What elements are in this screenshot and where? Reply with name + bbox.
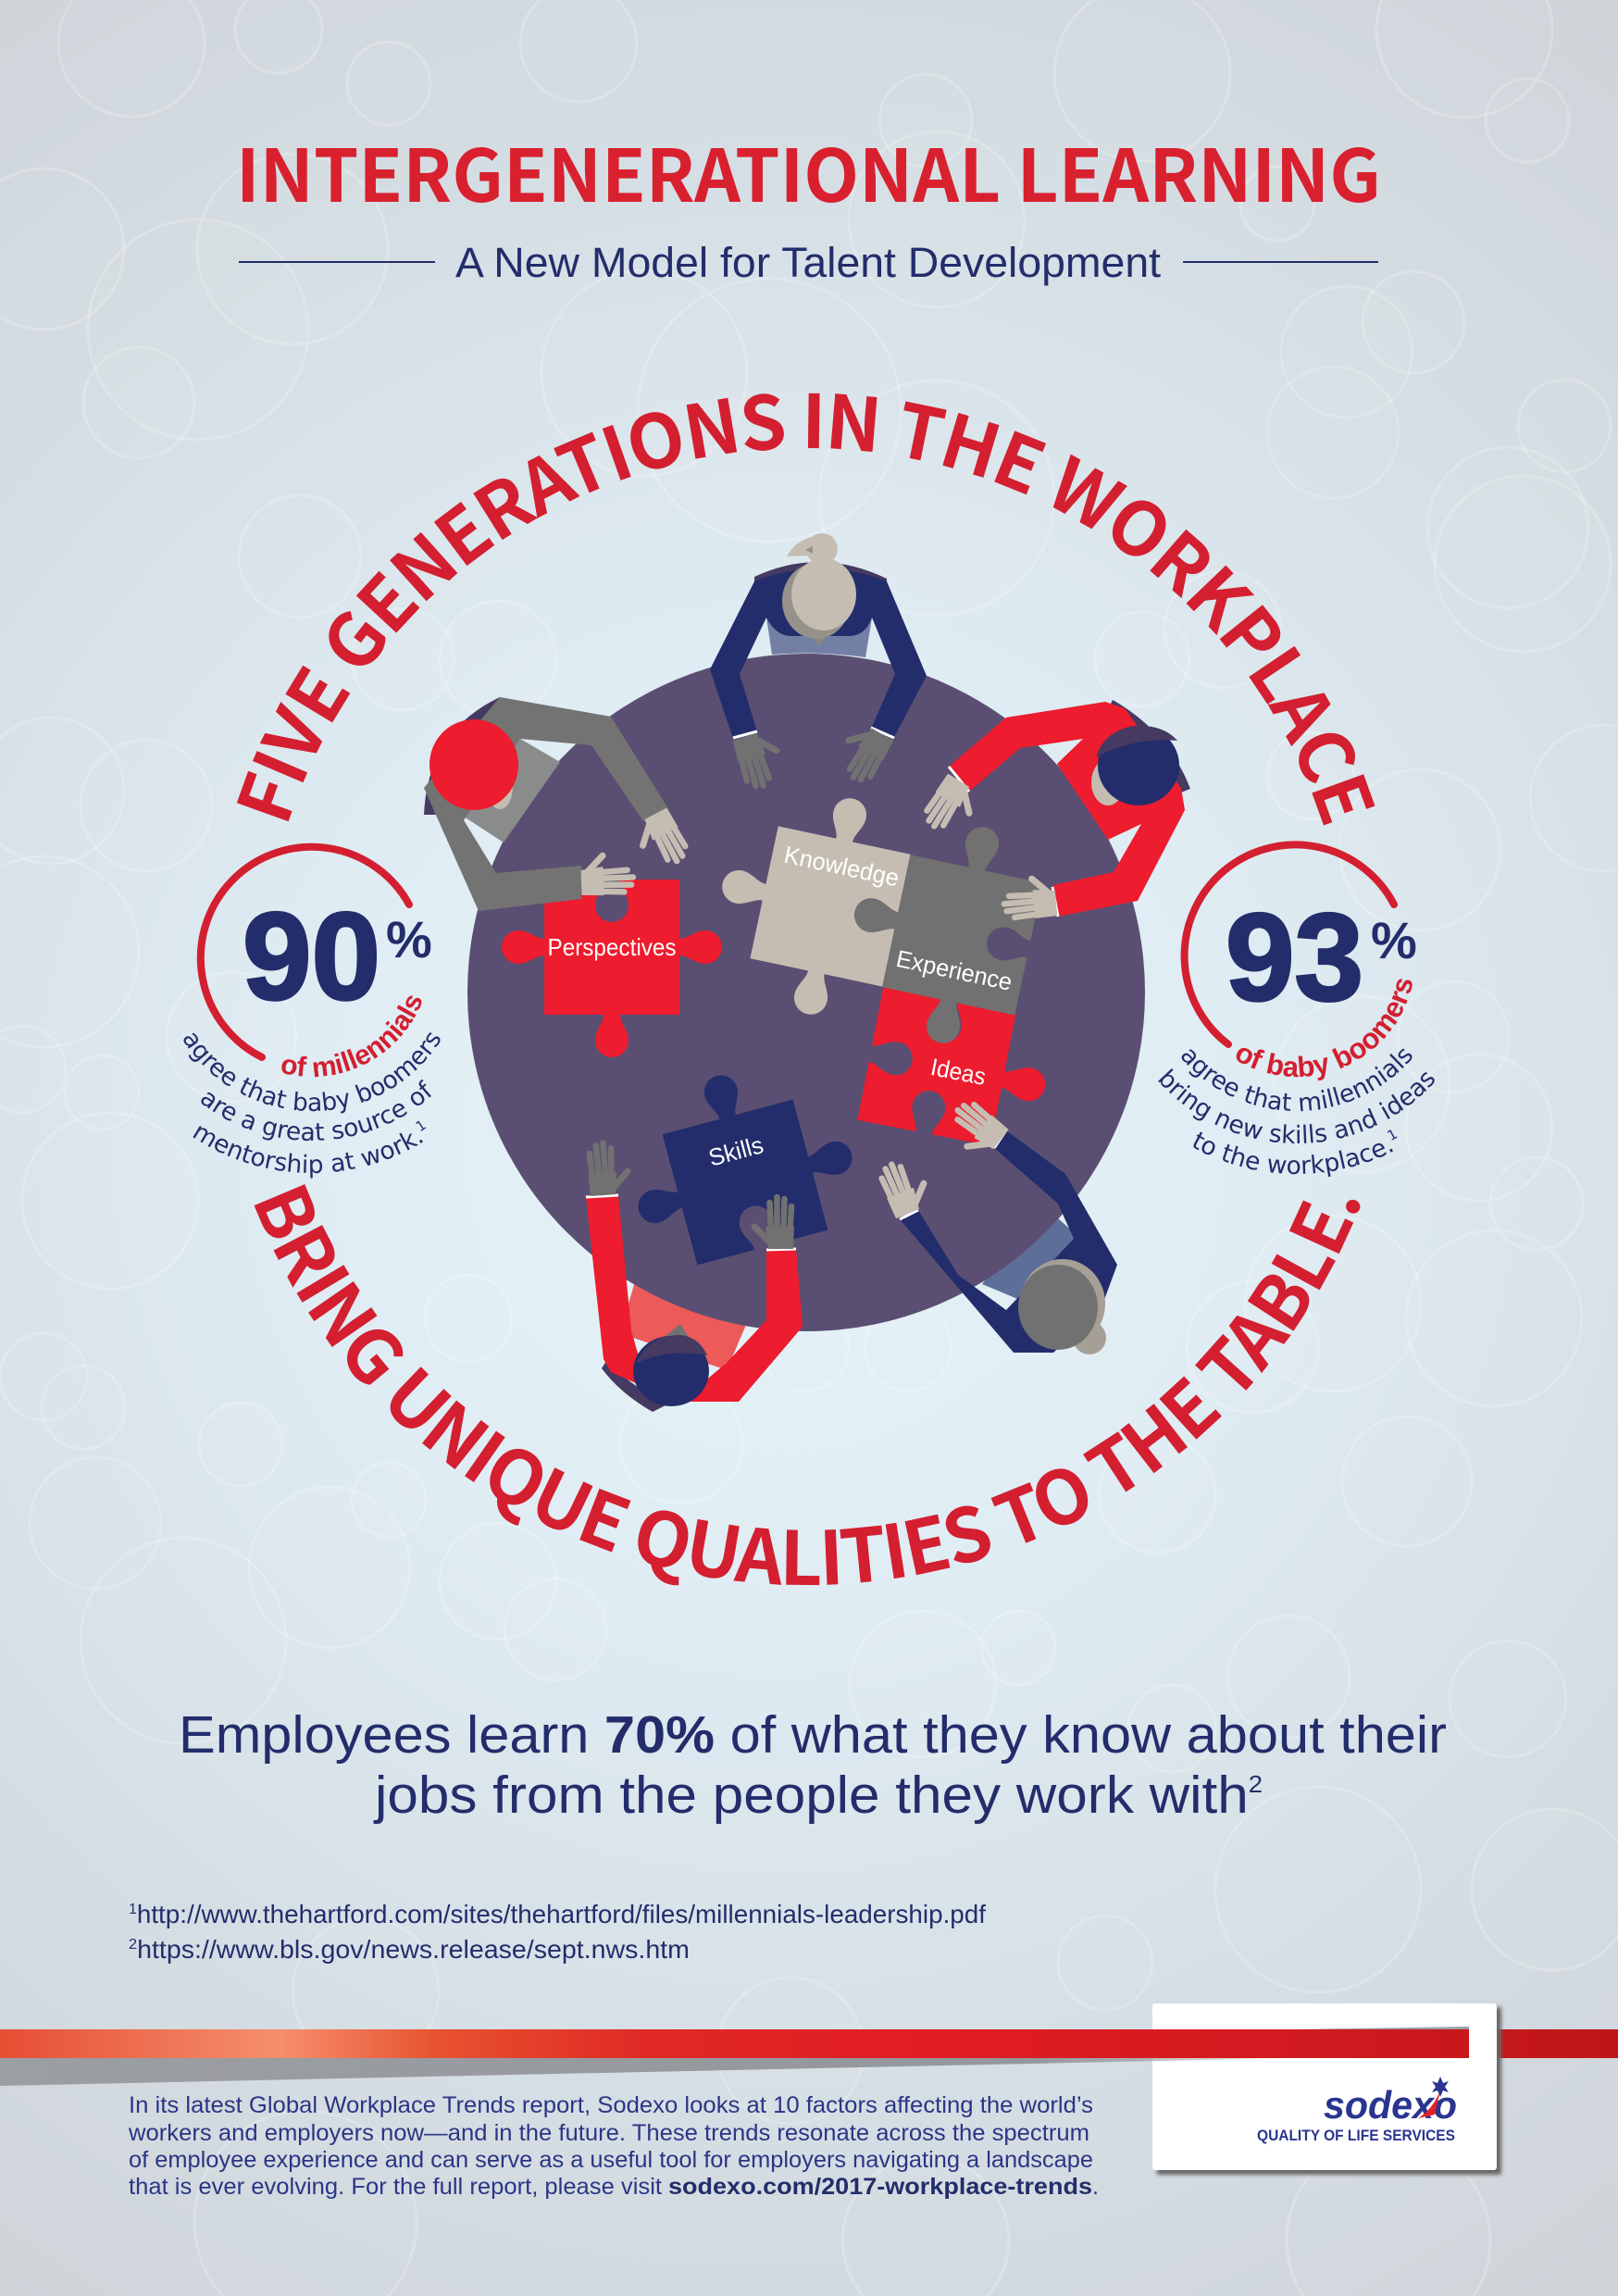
title: INTERGENERATIONAL LEARNING bbox=[236, 119, 1381, 223]
puzzle: perspectives bbox=[502, 880, 722, 1057]
curved description: to the workplace. bbox=[1193, 1131, 1393, 1178]
logo: sodexo bbox=[1257, 2077, 1457, 2144]
logo card shadow bbox=[1157, 2007, 1501, 2175]
band over card bbox=[1152, 2029, 1469, 2058]
puzzle: experience: Experience bbox=[894, 944, 1014, 996]
logo card bbox=[1152, 2003, 1497, 2170]
percent sign: % bbox=[1371, 911, 1417, 969]
footnotes bbox=[129, 1900, 986, 1964]
number: 93 bbox=[1226, 889, 1363, 1027]
logo swoosh bbox=[1418, 2090, 1440, 2118]
footnotes: https://www.bls.gov/news.release/sept.nws.htm bbox=[137, 1935, 690, 1964]
logo tagline: QUALITY OF LIFE SERVICES bbox=[1257, 2127, 1455, 2144]
statement: 70 percent: Employees learn 70% of what they know about their bbox=[179, 1705, 1447, 1765]
ring arc bbox=[201, 847, 409, 1057]
person: bottom left, red jacket bbox=[586, 1142, 803, 1412]
person: left, grey jacket bbox=[424, 697, 692, 911]
curved description bbox=[1158, 1048, 1435, 1178]
statement: 70 percent bbox=[179, 1705, 1447, 1825]
puzzle: skills bbox=[610, 1047, 869, 1276]
curved description: agree that baby boomers bbox=[183, 1032, 441, 1114]
number: 90 bbox=[243, 888, 380, 1026]
footer paragraph: of employee experience and can serve as a useful tool for employers navigating a landscape bbox=[129, 2147, 1093, 2173]
subtitle with rules: A New Model for Talent Development bbox=[455, 239, 1162, 286]
person: right, red jacket bbox=[920, 700, 1190, 921]
footer paragraph: workers and employers now—and in the future. These trends resonate across the spectrum bbox=[128, 2120, 1089, 2146]
footer paragraph: that is ever evolving. For the full report, please visit bbox=[129, 2174, 662, 2200]
stat: 93 percent of baby boomers bbox=[1158, 841, 1435, 1178]
puzzle: knowledge bbox=[700, 776, 919, 1029]
curved description: 1 bbox=[1387, 1129, 1398, 1141]
logo star bbox=[1432, 2077, 1449, 2097]
puzzle: ideas bbox=[857, 987, 1058, 1154]
round table bbox=[467, 654, 1145, 1331]
shirts under the table edge bbox=[620, 1204, 1083, 1370]
footnotes: 2 bbox=[129, 1937, 137, 1953]
puzzle: perspectives: Perspectives bbox=[548, 933, 676, 961]
grey band shadow bbox=[0, 2058, 1289, 2086]
footnotes: 1 bbox=[129, 1902, 137, 1917]
person: top, navy jacket bbox=[710, 533, 927, 791]
percent sign: % bbox=[386, 910, 432, 968]
red curved label: of millennials bbox=[281, 996, 422, 1078]
curved heading: unique qualities: BRING UNIQUE QUALITIES TO THE TABLE. bbox=[254, 1184, 1361, 1585]
ring arc bbox=[1185, 844, 1394, 1044]
puzzle pieces bbox=[502, 776, 1058, 1276]
red curved label: of baby boomers bbox=[1237, 979, 1413, 1081]
footnotes: http://www.thehartford.com/sites/thehartford/files/millennials-leadership.pdf bbox=[137, 1900, 986, 1928]
puzzle: skills: Skills bbox=[705, 1130, 766, 1172]
footer paragraph: In its latest Global Workplace Trends report, Sodexo looks at 10 factors affecting the world’s bbox=[129, 2092, 1093, 2118]
logo: sodexo: sodexo bbox=[1324, 2083, 1457, 2127]
curved description: are a great source of bbox=[201, 1079, 431, 1141]
statement: 70 percent: 2 bbox=[1249, 1770, 1263, 1798]
curved description: mentorship at work. bbox=[193, 1126, 423, 1179]
stat: 90 percent of millennials bbox=[183, 842, 441, 1179]
puzzle: experience bbox=[832, 805, 1052, 1057]
person: bottom right, navy jacket bbox=[876, 1097, 1117, 1354]
curved description: 1 bbox=[416, 1120, 426, 1131]
footer paragraph: . bbox=[1092, 2174, 1099, 2200]
footer paragraph bbox=[128, 2092, 1099, 2200]
red footer band bbox=[0, 2029, 1618, 2058]
curved heading: five generations: FIVE GENERATIONS IN THE WORKPLACE bbox=[237, 393, 1375, 826]
curved description bbox=[183, 1032, 441, 1179]
statement: 70 percent: jobs from the people they work with bbox=[375, 1766, 1201, 1825]
band top highlight bbox=[1296, 2027, 1469, 2029]
curved description: agree that millennials bbox=[1181, 1048, 1413, 1111]
curved description: bring new skills and ideas bbox=[1158, 1068, 1435, 1144]
footer paragraph: sodexo.com/2017-workplace-trends bbox=[668, 2174, 1092, 2200]
puzzle: ideas: Ideas bbox=[928, 1053, 989, 1091]
puzzle: knowledge: Knowledge bbox=[782, 841, 902, 892]
